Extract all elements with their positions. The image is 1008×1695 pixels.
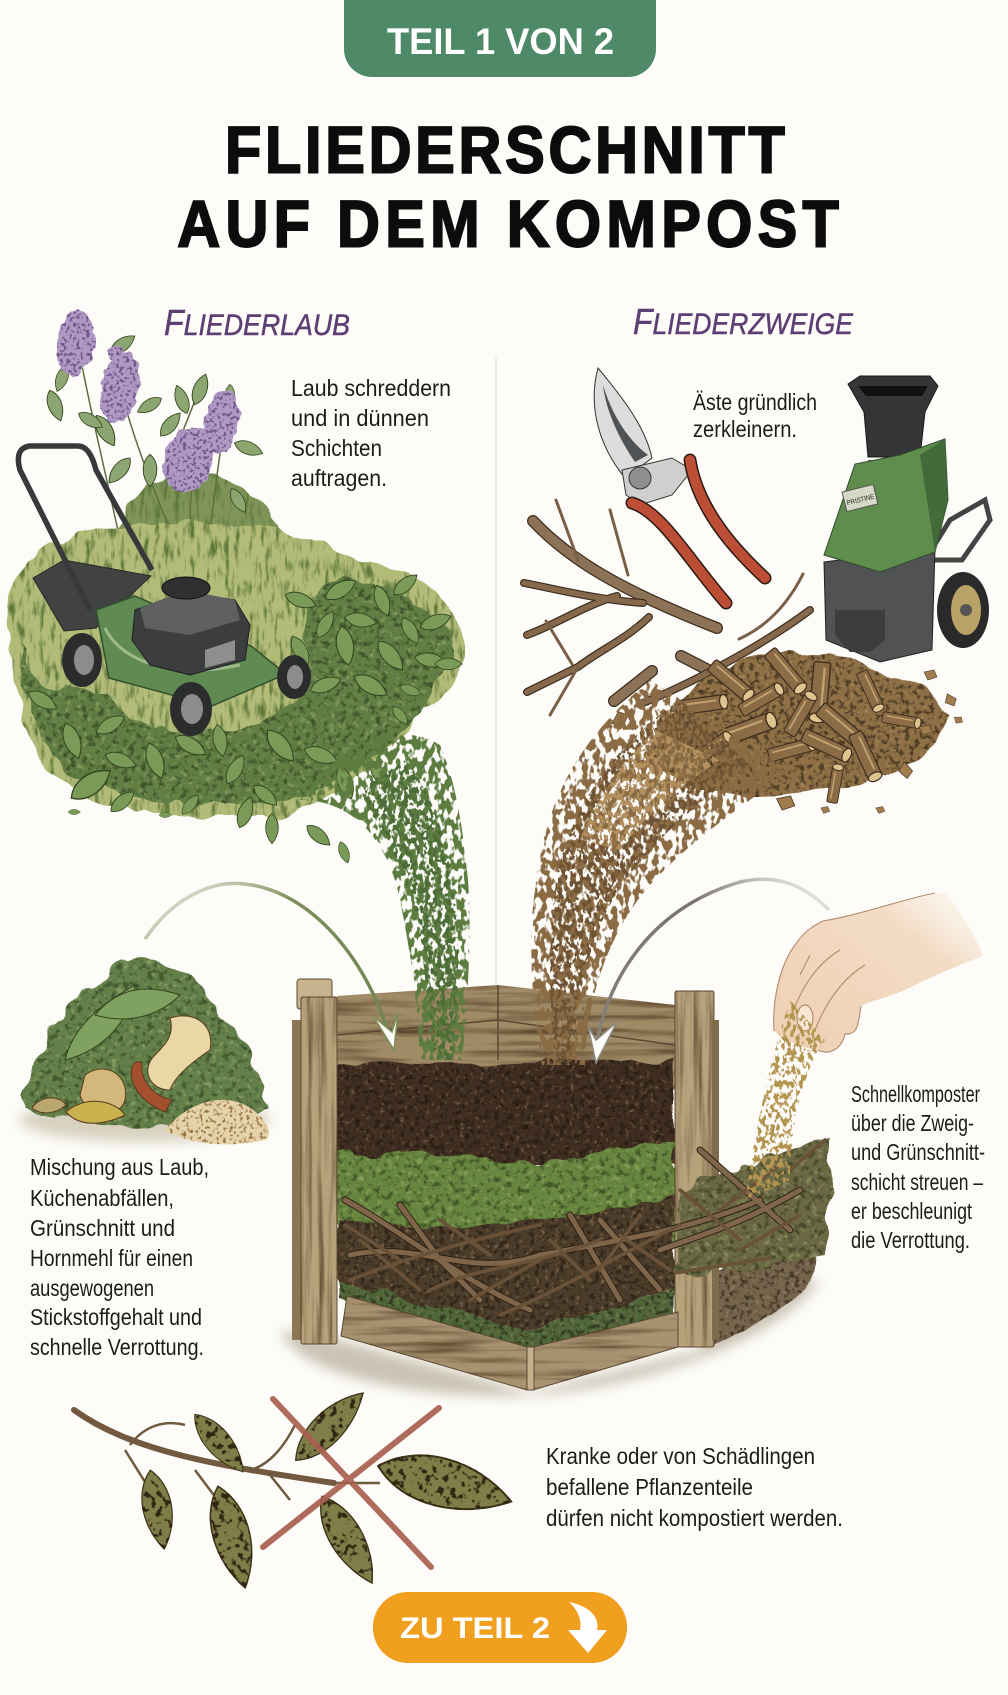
big leaves <box>65 985 180 1060</box>
instruction text: leaves: Schichten <box>291 435 382 461</box>
illustration: compost bin <box>280 979 832 1396</box>
centre divider <box>495 357 497 985</box>
instruction text: leaves: Laub schreddern <box>291 375 451 401</box>
instruction text: leaves <box>291 375 451 491</box>
quick composter granules <box>745 1000 825 1200</box>
button: zu Teil 2: ZU TEIL 2 <box>400 1612 550 1645</box>
text: compost mix: Grünschnitt und <box>30 1215 175 1241</box>
instruction text: branches: Äste gründlich <box>693 389 817 415</box>
heap mound <box>22 961 270 1124</box>
outer side wall <box>712 1250 815 1345</box>
left post <box>292 979 337 1344</box>
icon: curved down arrow <box>568 1602 607 1653</box>
text: compost mix: schnelle Verrottung. <box>30 1334 204 1360</box>
illustration: compost mix heap <box>20 961 270 1144</box>
mower engine <box>132 577 250 675</box>
title: FLIEDERSCHNITT <box>225 114 785 187</box>
heading: Fliederzweige: FLIEDERZWEIGE <box>633 301 854 342</box>
red cross <box>263 1399 439 1567</box>
instruction text: branches <box>693 389 817 442</box>
heap shadow <box>20 1098 270 1142</box>
title <box>177 114 839 261</box>
soil layer <box>337 1059 675 1165</box>
text: quick composter: er beschleunigt <box>851 1198 972 1224</box>
twig layer background <box>337 1195 675 1330</box>
bottom green layer <box>337 1285 675 1355</box>
illustration: garden shredder: PRISTINE <box>846 494 875 507</box>
button: zu Teil 2 <box>373 1592 627 1663</box>
wood chips falling stream <box>531 680 790 1065</box>
text: compost mix: Stickstoffgehalt und <box>30 1304 202 1330</box>
horn meal pile <box>165 1100 269 1144</box>
instruction text: leaves: und in dünnen <box>291 405 429 431</box>
illustration: garden shredder <box>824 376 990 662</box>
diseased leaves <box>136 1382 517 1592</box>
text: compost mix <box>30 1154 209 1360</box>
mower wheels <box>62 633 311 736</box>
warning text <box>546 1443 843 1531</box>
branch <box>74 1410 334 1483</box>
illustration: diseased branch crossed out <box>74 1382 517 1592</box>
text: quick composter: die Verrottung. <box>851 1227 970 1253</box>
ground shadow <box>280 1280 820 1396</box>
front boards <box>341 1296 527 1390</box>
illustration: lilac bush <box>43 307 285 565</box>
back walls <box>337 985 675 1090</box>
heading: Fliederlaub: FLIEDERLAUB <box>164 302 350 343</box>
warning text: befallene Pflanzenteile <box>546 1474 753 1500</box>
illustration: cut branches <box>524 500 810 715</box>
illustration: lawn and shredded leaves <box>10 522 465 865</box>
right post <box>675 991 719 1347</box>
green layer <box>337 1140 675 1250</box>
instruction text: leaves: auftragen. <box>291 465 387 491</box>
badge: Teil 1 von 2 <box>344 0 656 77</box>
mower grass bag <box>33 560 151 631</box>
instruction text: branches: zerkleinern. <box>693 416 797 442</box>
green arrow from heap <box>145 883 398 1050</box>
mower deck <box>96 596 286 706</box>
badge: Teil 1 von 2: TEIL 1 VON 2 <box>387 21 614 62</box>
text: quick composter <box>851 1081 985 1253</box>
illustration: hand <box>774 892 983 1052</box>
woven twig layer <box>345 1140 825 1315</box>
text: compost mix: Mischung aus Laub, <box>30 1154 209 1180</box>
text: compost mix: ausgewogenen <box>30 1275 154 1301</box>
warning text: dürfen nicht kompostiert werden. <box>546 1505 843 1531</box>
text: quick composter: über die Zweig- <box>851 1110 974 1136</box>
title: AUF DEM KOMPOST <box>177 188 839 261</box>
text: compost mix: Küchenabfällen, <box>30 1185 174 1211</box>
text: compost mix: Hornmehl für einen <box>30 1245 193 1271</box>
leaves falling stream <box>300 734 470 1060</box>
mower handle <box>18 446 152 610</box>
illustration: pruning shears <box>594 368 765 603</box>
illustration: lawn mower <box>18 446 311 736</box>
illustration: wood chip pile <box>610 647 963 814</box>
warning text: Kranke oder von Schädlingen <box>546 1443 815 1469</box>
apple cores <box>32 1016 211 1123</box>
grey arrow from hand <box>588 879 829 1063</box>
right side bulge of twigs and green <box>675 1138 832 1276</box>
